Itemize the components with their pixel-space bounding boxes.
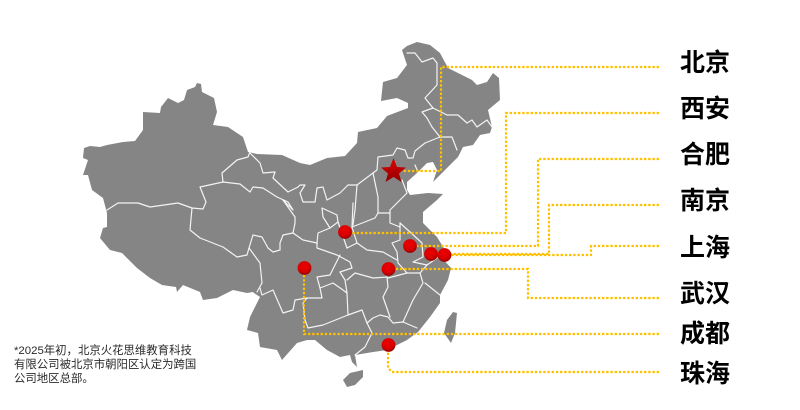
mainland outline xyxy=(83,42,500,367)
city label: 南京: 南京 xyxy=(680,187,730,215)
footnote: *2025年初，北京火花思维教育科技 xyxy=(14,343,192,357)
marker: 成都 xyxy=(298,261,311,275)
marker: 武汉 xyxy=(382,262,395,276)
footnote: 公司地区总部。 xyxy=(14,371,94,385)
city label: 武汉: 武汉 xyxy=(680,280,730,308)
city label: 西安: 西安 xyxy=(680,95,730,123)
city label: 上海: 上海 xyxy=(680,234,730,262)
footnote xyxy=(14,343,196,385)
Hainan xyxy=(343,370,363,387)
city label: 成都: 成都 xyxy=(680,320,730,348)
city label: 合肥: 合肥 xyxy=(680,141,730,169)
marker: 南京 xyxy=(424,247,438,261)
map of China xyxy=(83,42,500,387)
marker: 珠海 xyxy=(382,338,395,352)
star marker: 北京 xyxy=(381,158,406,182)
marker: 上海 xyxy=(438,248,451,262)
connector lines xyxy=(304,67,659,372)
footnote: 有限公司被北京市朝阳区认定为跨国 xyxy=(14,357,196,371)
province borders xyxy=(107,53,492,355)
marker: 合肥 xyxy=(403,239,417,253)
city label: 珠海: 珠海 xyxy=(680,360,730,388)
Taiwan xyxy=(444,312,457,343)
marker: 西安 xyxy=(338,225,352,239)
city label: 北京: 北京 xyxy=(680,49,730,77)
